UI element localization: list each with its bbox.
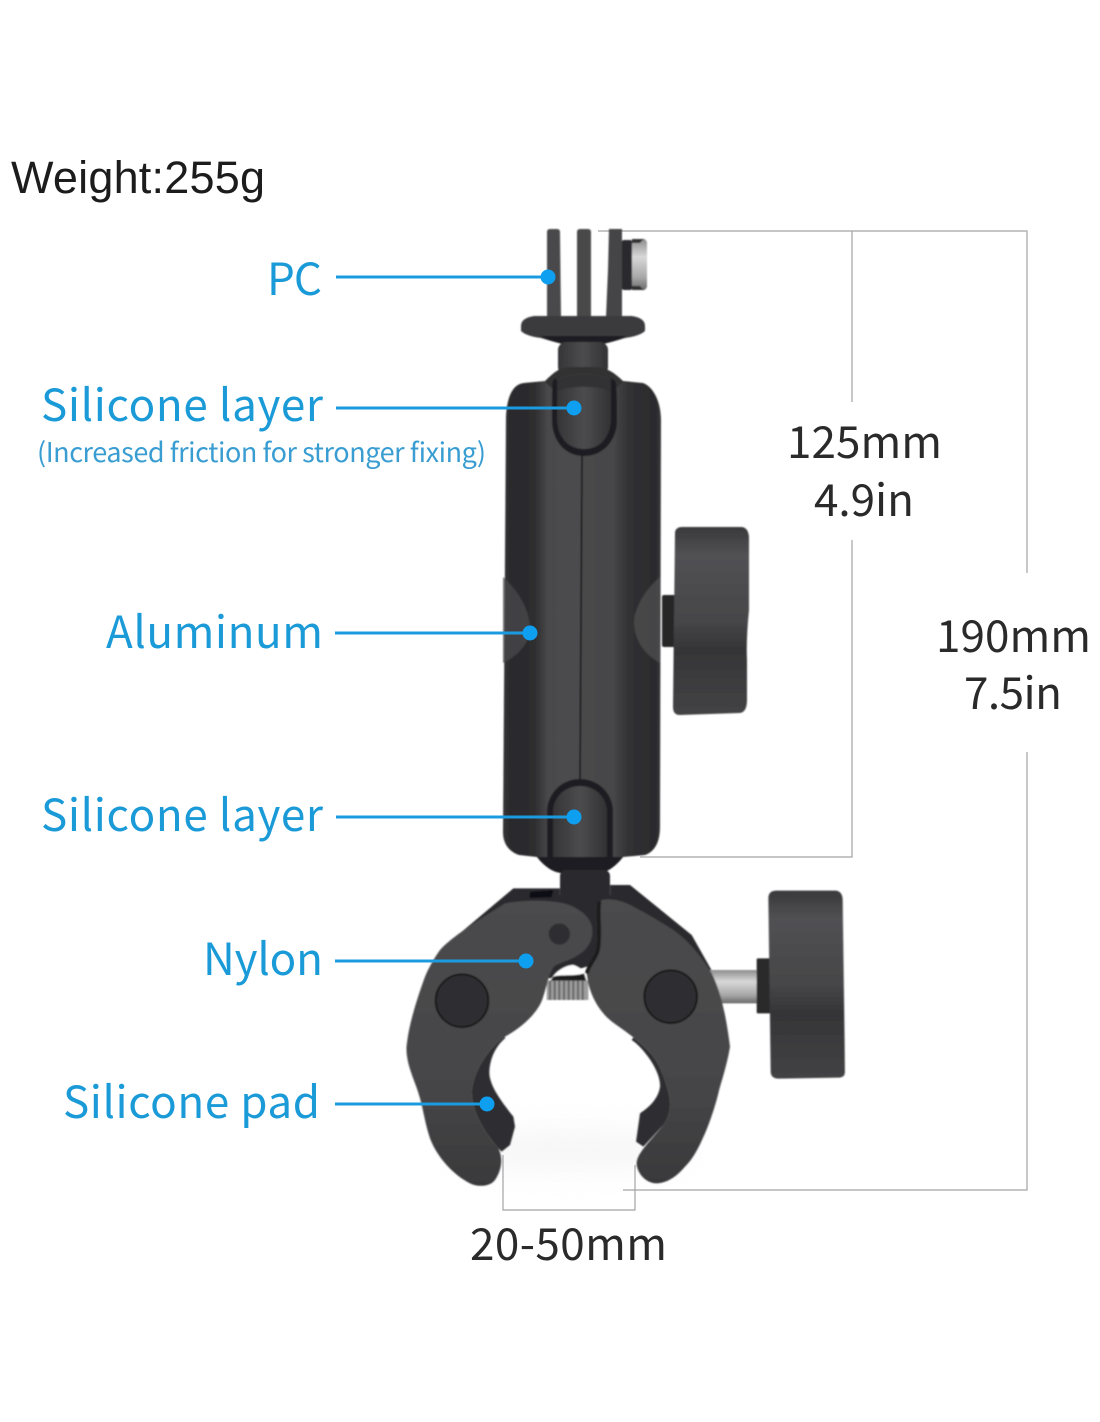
arm knob [662,527,749,715]
clamp back plate [440,885,713,978]
callout: silicone layer top: Silicone layer [41,370,324,434]
callout: silicone layer top: (Increased friction for stronger fixing) [37,431,486,470]
callout: aluminum: Aluminum [106,597,323,661]
dimension: 190mm: 190mm [936,601,1091,665]
dimension: 125mm: 4.9in [814,465,914,529]
callout: nylon: Nylon [203,924,323,988]
dimension: 125mm: 125mm [787,407,942,471]
left dimple [503,577,530,663]
dimension: 125mm [787,407,942,529]
product photo: clamp mount [407,229,845,1186]
right jaw [587,899,730,1183]
right rivet [644,970,697,1023]
plate slot [529,890,553,898]
clamp neck [560,870,610,900]
seam [580,452,582,782]
callout: PC: PC [267,244,322,308]
callout: nylon [203,924,534,988]
jaw divider [587,902,599,973]
callout: aluminum [106,597,538,661]
clamp assembly [407,885,845,1186]
left silicone pad [472,1037,515,1152]
camera mount prongs [521,229,647,375]
right dimple [634,577,660,663]
callout: PC [267,244,556,308]
dimension lines [503,231,1027,1210]
bottom ball socket [537,779,623,873]
left jaw [407,901,592,1186]
callout: silicone layer top [37,370,582,470]
callout: silicone pad: Silicone pad [63,1067,320,1131]
arm body [503,367,661,873]
callout: silicone pad [63,1067,494,1131]
left rivet [436,974,488,1027]
screw opening [552,965,587,982]
dimension: clamp opening: 20-50mm [470,1209,667,1273]
callout: silicone layer bottom: Silicone layer [41,780,324,844]
floor shadow [450,1132,690,1168]
callout: silicone layer bottom [41,780,582,844]
right silicone pad [632,1037,670,1147]
dimension: 190mm [936,601,1091,722]
weight heading: Weight:255g [11,152,265,203]
clamp knob [757,891,845,1079]
top dome [545,367,623,392]
steel shaft [707,970,760,1003]
top ball socket [552,374,617,456]
threaded bolt [547,981,588,1000]
pivot hole [549,923,570,945]
dimension: 190mm: 7.5in [964,658,1062,722]
